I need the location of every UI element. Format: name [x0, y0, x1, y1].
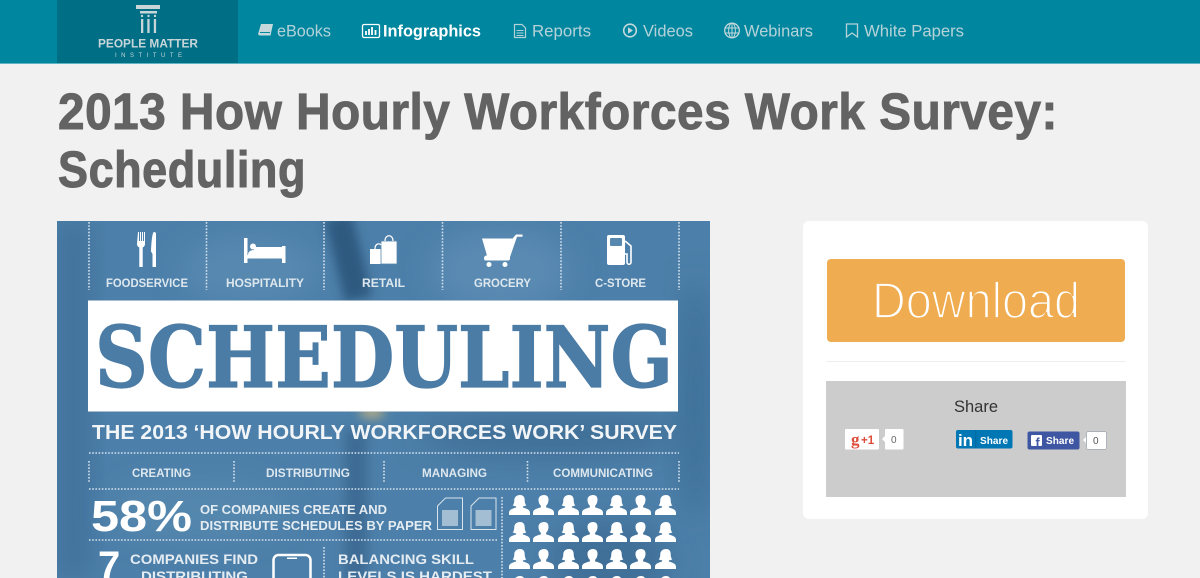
logo: People Matter Institute — [57, 0, 238, 63]
statistic: 7 companies: COMPANIES FIND — [130, 551, 258, 567]
icon: smartphone — [274, 555, 310, 578]
statistic: 58% paper schedules — [92, 500, 432, 532]
nav item: Webinars: Webinars — [744, 22, 813, 40]
label: retail: RETAIL — [362, 278, 405, 290]
page title: 2013 How Hourly Workforces Work Survey: — [58, 83, 1058, 140]
title banner: scheduling: SCHEDULING — [95, 308, 673, 407]
share heading: Share — [954, 398, 998, 416]
top category dividers — [89, 222, 679, 290]
label: hospitality: HOSPITALITY — [226, 278, 304, 290]
facebook button — [1028, 432, 1106, 450]
infographic preview — [57, 213, 711, 578]
icon: grocery cart — [482, 234, 522, 267]
linkedin button: in — [958, 431, 973, 450]
nav item: Videos: Videos — [643, 22, 693, 40]
icon: hotel bed — [244, 238, 286, 263]
google plus button: +1 — [861, 435, 875, 447]
nav item: Reports: Reports — [532, 22, 591, 40]
icon: shopping bags — [370, 236, 397, 264]
logo: People Matter Institute: INSTITUTE — [115, 53, 182, 59]
google plus button — [845, 429, 904, 450]
page title: Scheduling — [58, 141, 306, 198]
label: foodservice: FOODSERVICE — [106, 278, 188, 290]
dotted dividers — [89, 497, 502, 578]
icon: paper documents — [438, 498, 496, 530]
navigation bar — [0, 0, 1200, 64]
subtitle: THE 2013 ‘HOW HOURLY WORKFORCES WORK’ SURVEY — [92, 421, 677, 444]
label: grocery: GROCERY — [474, 278, 531, 290]
icon: fork and knife — [137, 232, 156, 267]
infographic photo background — [57, 213, 711, 578]
section tabs: CREATING — [132, 468, 191, 480]
logo: People Matter Institute: PEOPLE MATTER — [98, 36, 198, 50]
nav item: White Papers: White Papers — [864, 22, 964, 40]
facebook button: 0 — [1093, 436, 1099, 447]
section tabs — [89, 453, 679, 489]
nav item: Infographics: Infographics — [383, 22, 481, 40]
section tabs: MANAGING — [422, 468, 487, 480]
linkedin button: Share — [980, 436, 1008, 447]
page title — [58, 83, 1058, 198]
people pictogram — [509, 495, 676, 578]
statistic: 7 companies — [100, 552, 258, 578]
facebook button: Share — [1046, 436, 1074, 447]
share panel — [826, 381, 1126, 497]
statistic: 58% paper schedules: DISTRIBUTE SCHEDULES BY PAPER — [200, 518, 433, 533]
statistic: 58% paper schedules: 58% — [91, 492, 192, 541]
linkedin button — [956, 430, 1012, 450]
statistic: balancing skill levels — [339, 554, 492, 578]
statistic: 58% paper schedules: OF COMPANIES CREATE AND — [200, 502, 387, 517]
download button — [827, 259, 1125, 342]
label: c-store: C-STORE — [595, 278, 646, 290]
google plus button: 0 — [891, 435, 897, 446]
google plus button: g — [851, 430, 860, 449]
statistic: balancing skill levels: BALANCING SKILL — [338, 551, 474, 567]
facebook button: f — [1036, 436, 1040, 450]
sidebar card — [803, 221, 1148, 519]
nav item: eBooks: eBooks — [277, 22, 331, 40]
section tabs: DISTRIBUTING — [266, 468, 350, 480]
download button: Download — [872, 272, 1080, 329]
section tabs: COMMUNICATING — [553, 468, 653, 480]
icon: fuel pump — [607, 235, 631, 265]
